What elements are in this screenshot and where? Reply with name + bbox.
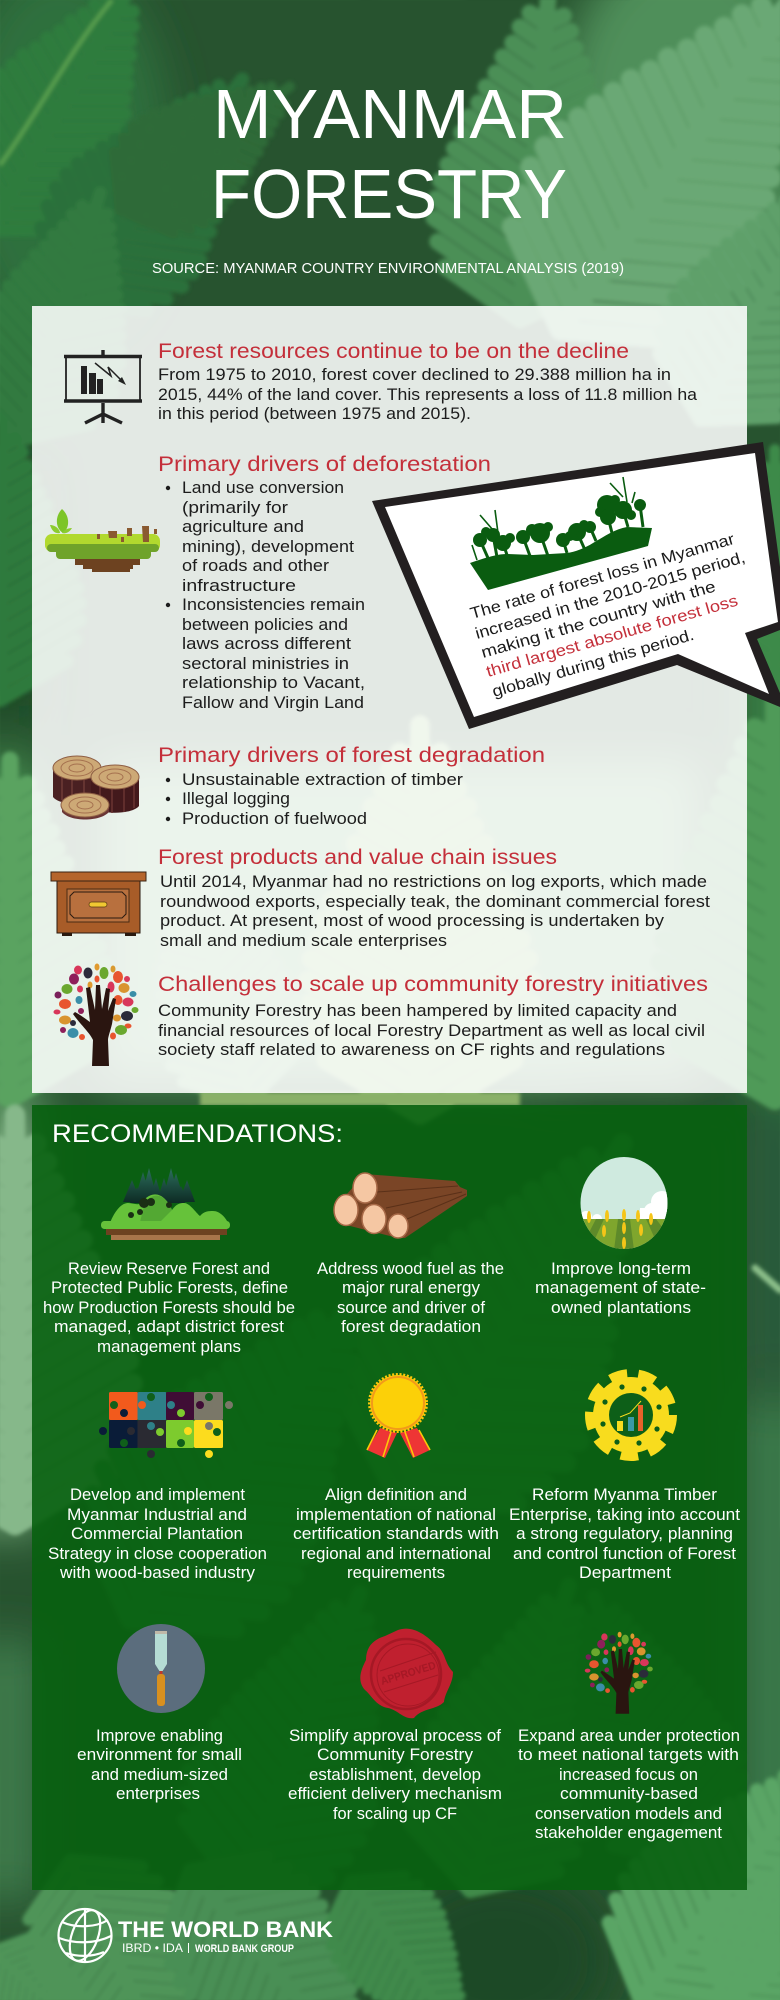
logo: the world bank: IBRD • IDA — [122, 1941, 183, 1955]
list: deforestation drivers: agriculture and — [182, 518, 304, 536]
text: callout message: The rate of forest loss in Myanmar — [468, 531, 737, 623]
text: wood fuel: forest degradation — [341, 1318, 481, 1336]
text: community forestry: Community Forestry has been hampered by limited capacity and — [158, 1002, 677, 1020]
icon: chisel in grey oval — [117, 1624, 205, 1713]
text: wood fuel — [317, 1260, 504, 1336]
text: value chain: product. At present, most of wood processing is undertaken by — [160, 912, 665, 930]
text: protected area: community-based — [560, 1785, 698, 1803]
logo: the world bank: WORLD BANK GROUP — [195, 1943, 294, 1955]
text: callout message: third largest absolute forest loss — [484, 593, 740, 681]
text: plantation strategy: Commercial Plantation — [71, 1525, 243, 1543]
icon: small hand tree — [585, 1632, 653, 1714]
list: deforestation drivers: (primarily for — [182, 499, 289, 517]
list: deforestation drivers: Fallow and Virgin Land — [182, 694, 364, 712]
list: deforestation drivers: infrastructure — [182, 577, 296, 595]
heading: degradation: Primary drivers of forest degradation — [158, 744, 545, 767]
text: enabling environment: Improve enabling — [96, 1727, 223, 1745]
text: forest resources: in this period (between 1975 and 2015). — [158, 405, 471, 423]
logo: the world bank: THE WORLD BANK — [118, 1917, 333, 1942]
heading: community forestry: Challenges to scale up community forestry initiatives — [158, 973, 708, 996]
list: degradation drivers: Illegal logging — [182, 790, 290, 808]
text: certification — [293, 1486, 499, 1582]
list: degradation drivers — [166, 771, 464, 828]
text: enabling environment: enterprises — [116, 1785, 200, 1803]
text: forest resources — [158, 366, 698, 423]
panel: forest analysis — [32, 306, 747, 1093]
text: callout message: globally during this period. — [490, 627, 696, 701]
text: wood fuel: source and driver of — [337, 1299, 485, 1317]
text: plantation strategy: Develop and implement — [70, 1486, 245, 1504]
icon: gear with bar chart — [591, 1375, 671, 1455]
text: plantation strategy: Strategy in close cooperation — [48, 1545, 267, 1563]
list: deforestation drivers: mining), development — [182, 538, 354, 556]
text: plantation strategy — [48, 1486, 267, 1582]
recommendation: enabling environment — [77, 1624, 242, 1803]
recommendation: plantation strategy — [48, 1392, 267, 1582]
icon: stacked logs — [334, 1173, 467, 1238]
heading: recommendations: RECOMMENDATIONS: — [52, 1120, 343, 1148]
list: deforestation drivers: between policies and — [182, 616, 348, 634]
source line: SOURCE: MYANMAR COUNTRY ENVIRONMENTAL ANALYSIS (2019) — [152, 261, 624, 277]
text: certification: implementation of national — [296, 1506, 496, 1524]
text: reserve forest: Review Reserve Forest and — [68, 1260, 270, 1278]
icon: forest silhouette — [470, 477, 652, 590]
text: wood fuel: Address wood fuel as the — [317, 1260, 504, 1278]
icon: plantation landscape oval — [580, 1157, 668, 1249]
text: plantations: owned plantations — [551, 1299, 691, 1317]
text: enabling environment: and medium-sized — [91, 1766, 228, 1784]
text: community forestry: financial resources of local Forestry Department as well as local civil — [158, 1022, 705, 1040]
text: callout message: making it the country with the — [479, 578, 718, 662]
list: deforestation drivers: sectoral ministries in — [182, 655, 349, 673]
heading: value chain: Forest products and value chain issues — [158, 846, 557, 869]
recommendation: timber enterprise — [509, 1375, 740, 1582]
list: degradation drivers: Unsustainable extraction of timber — [182, 771, 464, 789]
heading: forest resources: Forest resources continue to be on the decline — [158, 340, 629, 363]
icon: floating island with tree stumps — [45, 509, 160, 572]
text: protected area — [518, 1727, 740, 1842]
recommendation: certification — [293, 1375, 499, 1582]
icon: wooden chest with drawer — [51, 872, 146, 936]
text: reserve forest — [43, 1260, 295, 1356]
text: protected area: conservation models and — [535, 1805, 722, 1823]
list: deforestation drivers: Land use conversion — [182, 479, 344, 497]
text: certification: regional and international — [301, 1545, 491, 1563]
text: timber enterprise: and control function of Forest — [513, 1545, 736, 1563]
icon: tree stumps — [53, 756, 139, 820]
list: degradation drivers: Production of fuelwood — [182, 810, 367, 828]
list: deforestation drivers: relationship to Vacant, — [182, 674, 365, 692]
text: value chain: Until 2014, Myanmar had no restrictions on log exports, which made — [160, 873, 707, 891]
text: value chain: small and medium scale enterprises — [160, 932, 447, 950]
text: forest resources: 2015, 44% of the land cover. This represents a loss of 11.8 million ha — [158, 386, 698, 404]
logo: the world bank — [58, 1906, 333, 1965]
text: plantations: Improve long-term — [551, 1260, 691, 1278]
text: approval process: Community Forestry — [317, 1746, 474, 1764]
text: plantation strategy: Myanmar Industrial and — [67, 1506, 247, 1524]
text: reserve forest: management plans — [97, 1338, 241, 1356]
list: deforestation drivers — [166, 479, 365, 712]
panel: recommendations — [32, 1105, 747, 1890]
text: plantations — [535, 1260, 706, 1317]
text: plantations: management of state- — [535, 1279, 706, 1297]
title: MYANMAR — [213, 75, 567, 153]
text: enabling environment — [77, 1727, 242, 1803]
icon: hand tree — [54, 964, 138, 1066]
text: timber enterprise: a strong regulatory, planning — [516, 1525, 733, 1543]
list: deforestation drivers: of roads and other — [182, 557, 330, 575]
text: callout message — [468, 531, 747, 701]
text: reserve forest: how Production Forests should be — [43, 1299, 295, 1317]
text: community forestry: society staff related to awareness on CF rights and regulations — [158, 1041, 665, 1059]
icon: forested island — [101, 1168, 230, 1240]
icon: jigsaw puzzle — [99, 1392, 233, 1458]
recommendation: reserve forest — [43, 1168, 295, 1356]
heading: deforestation: Primary drivers of deforestation — [158, 453, 491, 476]
recommendation: approval process — [288, 1629, 502, 1823]
text: certification: requirements — [347, 1564, 445, 1582]
text: reserve forest: managed, adapt district forest — [54, 1318, 284, 1336]
text: timber enterprise: Enterprise, taking into account — [509, 1506, 740, 1524]
recommendation: protected area — [518, 1632, 740, 1842]
text: value chain — [160, 873, 710, 950]
recommendation: plantations — [535, 1157, 706, 1317]
text: timber enterprise: Reform Myanma Timber — [532, 1486, 718, 1504]
text: certification: certification standards with — [293, 1525, 499, 1543]
text: community forestry — [158, 1002, 705, 1059]
text: value chain: roundwood exports, especially teak, the dominant commercial forest — [160, 893, 710, 911]
text: approval process: efficient delivery mechanism — [288, 1785, 502, 1803]
recommendation: wood fuel — [317, 1173, 504, 1336]
text: protected area: increased focus on — [559, 1766, 698, 1784]
text: certification: Align definition and — [325, 1486, 467, 1504]
list: deforestation drivers: Inconsistencies remain — [182, 596, 365, 614]
text: approval process: Simplify approval process of — [289, 1727, 501, 1745]
text: plantation strategy: with wood-based industry — [59, 1564, 256, 1582]
text: callout message: increased in the 2010-2015 period, — [473, 549, 747, 643]
icon: red wax seal approved — [360, 1629, 453, 1718]
title: FORESTRY — [211, 155, 567, 233]
text: approval process — [288, 1727, 502, 1823]
text: protected area: Expand area under protection — [518, 1727, 740, 1745]
icon: red wax seal approved: APPROVED — [379, 1660, 437, 1688]
text: approval process: establishment, develop — [309, 1766, 481, 1784]
icon: award rosette — [367, 1375, 430, 1458]
text: timber enterprise: Department — [579, 1564, 671, 1582]
list: deforestation drivers: laws across different — [182, 635, 351, 653]
text: protected area: stakeholder engagement — [535, 1824, 722, 1842]
text: reserve forest: Protected Public Forests, define — [51, 1279, 288, 1297]
icon: presentation board with falling chart — [64, 350, 142, 423]
text: approval process: for scaling up CF — [333, 1805, 457, 1823]
text: forest resources: From 1975 to 2010, forest cover declined to 29.388 million ha in — [158, 366, 671, 384]
text: timber enterprise — [509, 1486, 740, 1582]
text: protected area: to meet national targets with — [518, 1746, 739, 1764]
icon: globe — [58, 1906, 112, 1965]
text: enabling environment: environment for small — [77, 1746, 242, 1764]
callout: speech bubble on forest loss — [372, 442, 780, 729]
text: wood fuel: major rural energy — [342, 1279, 481, 1297]
title — [211, 75, 567, 233]
